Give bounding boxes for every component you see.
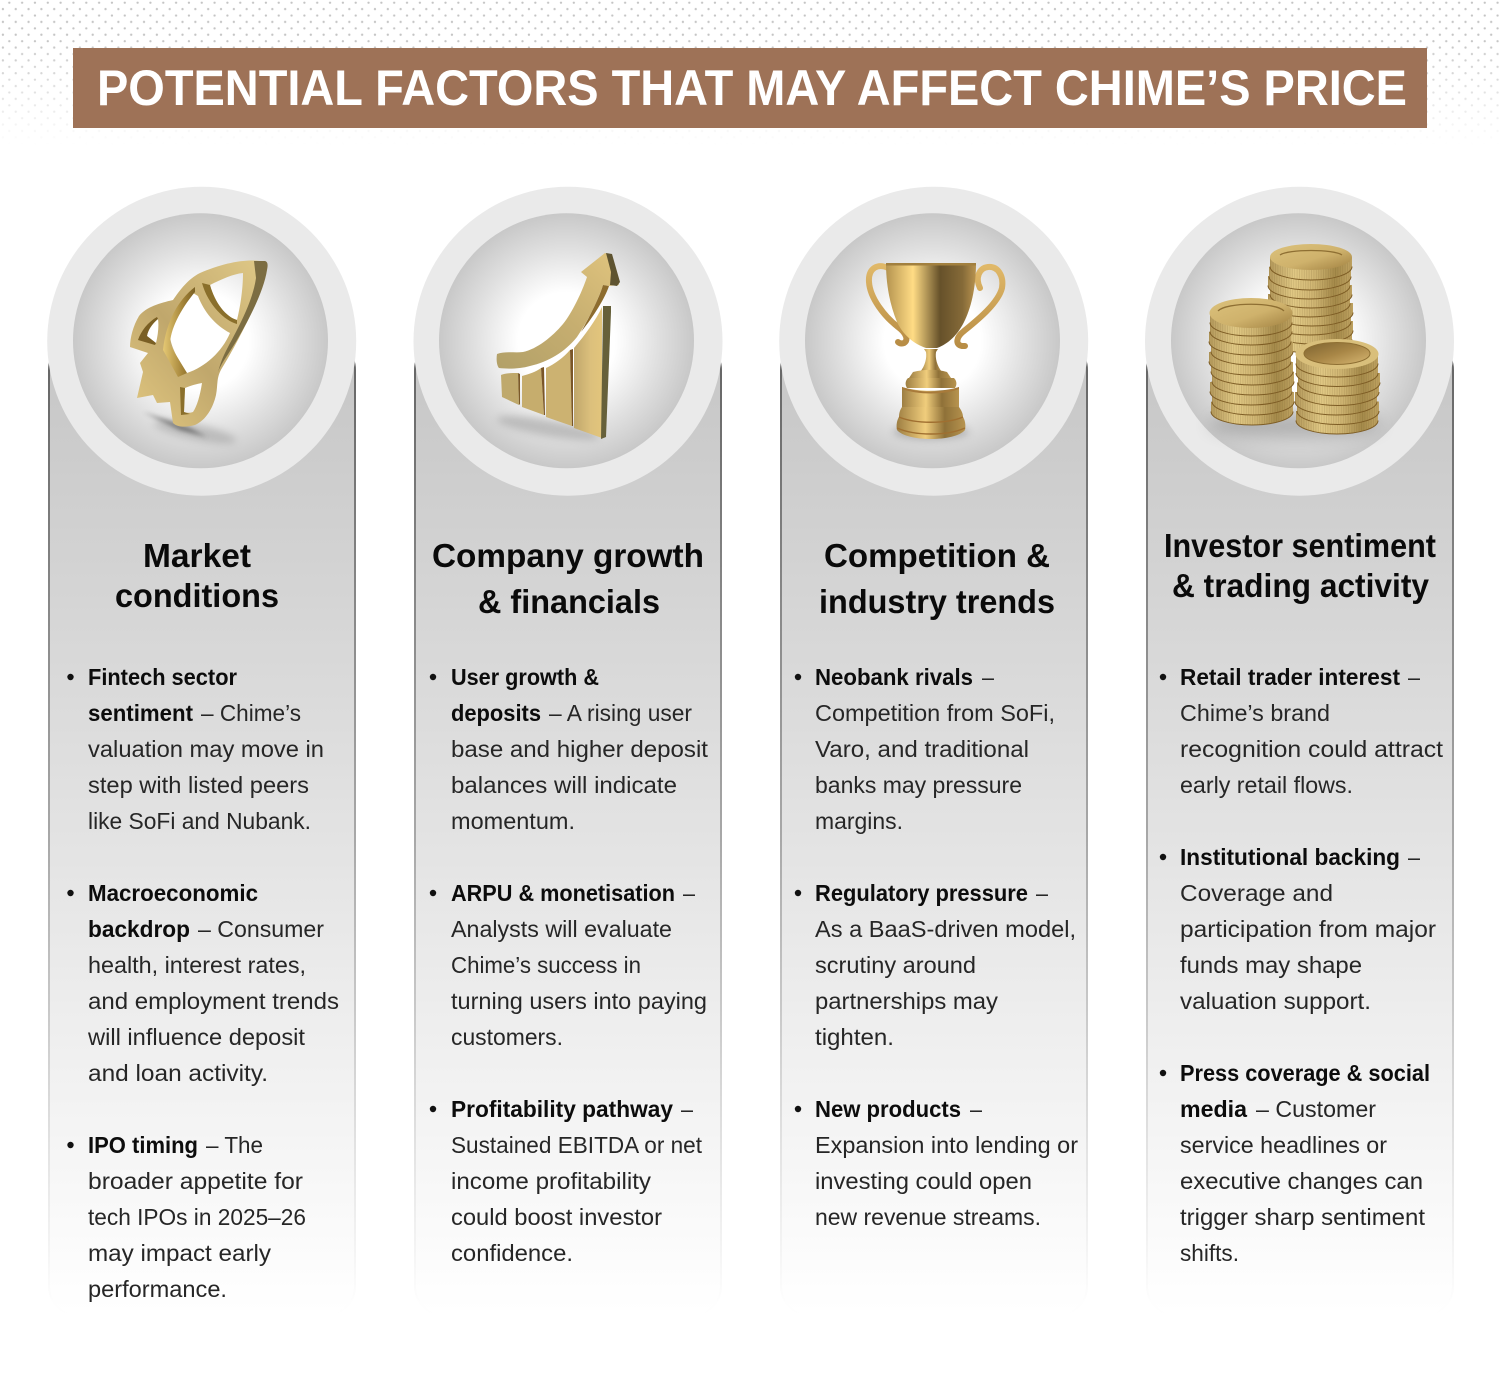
bullet: press coverage and social media: Press coverage & social <box>1180 1060 1430 1086</box>
bullet: regulatory pressure: As a BaaS-driven model, <box>815 916 1076 942</box>
bullet: fintech sector sentiment <box>67 664 324 834</box>
bullet: institutional backing: valuation support. <box>1180 988 1371 1014</box>
bullet: ARPU and monetisation: customers. <box>451 1024 563 1050</box>
bullet: IPO timing: may impact early <box>88 1240 272 1266</box>
bullet: fintech sector sentiment: – Chime’s <box>201 700 301 726</box>
bullet: regulatory pressure: partnerships may <box>815 988 999 1014</box>
bullet: user growth and deposits <box>430 664 709 834</box>
icon circle: coin stacks <box>1145 187 1454 496</box>
bullet: ARPU and monetisation <box>430 880 707 1050</box>
bullet: regulatory pressure: Regulatory pressure <box>815 880 1028 906</box>
bullet: macroeconomic backdrop: health, interest rates, <box>88 952 306 978</box>
bullet: profitability pathway <box>430 1096 703 1266</box>
bullet: user growth and deposits: – A rising user <box>549 700 692 726</box>
icon: gold rocket <box>130 260 268 449</box>
bullet: user growth and deposits: balances will indicate <box>451 772 677 798</box>
bullet: regulatory pressure: scrutiny around <box>815 952 976 978</box>
bullet: retail trader interest: – <box>1408 664 1420 690</box>
bullet: press coverage and social media <box>1160 1060 1430 1266</box>
bullet: profitability pathway: – <box>681 1096 693 1122</box>
bullet: new products: investing could open <box>815 1168 1032 1194</box>
title banner <box>73 48 1427 128</box>
heading: competition and industry trends: industry trends <box>819 583 1055 620</box>
bullet: new products: Expansion into lending or <box>815 1132 1078 1158</box>
bullet: ARPU and monetisation: – <box>683 880 695 906</box>
heading: investor sentiment and trading activity <box>1164 527 1436 604</box>
bullet: retail trader interest: recognition could attract <box>1180 736 1444 762</box>
bullet: press coverage and social media: – Customer <box>1256 1096 1376 1122</box>
dotted background pattern <box>2 2 1499 131</box>
bullet: user growth and deposits: User growth & <box>451 664 599 690</box>
bullet: new products <box>795 1096 1078 1230</box>
title: POTENTIAL FACTORS THAT MAY AFFECT CHIME’S PRICE <box>97 60 1407 116</box>
bullet: IPO timing: tech IPOs in 2025–26 <box>88 1204 306 1230</box>
bullet: neobank rivals: margins. <box>815 808 903 834</box>
bullet: neobank rivals: banks may pressure <box>815 772 1022 798</box>
bullet: macroeconomic backdrop <box>67 880 339 1086</box>
panel: company growth and financials <box>414 187 722 1316</box>
bullet: profitability pathway: could boost investor <box>451 1204 662 1230</box>
bullet: profitability pathway: Profitability pathway <box>451 1096 673 1122</box>
heading: competition and industry trends <box>819 537 1055 620</box>
icon: gold bar chart with arrow <box>495 253 620 445</box>
bullet: fintech sector sentiment: valuation may move in <box>88 736 324 762</box>
bullet: new products: – <box>970 1096 982 1122</box>
bullet: fintech sector sentiment: Fintech sector <box>88 664 237 690</box>
bullet: fintech sector sentiment: like SoFi and Nubank. <box>88 808 311 834</box>
bullet: new products: new revenue streams. <box>815 1204 1041 1230</box>
bullet: institutional backing: – <box>1408 844 1420 870</box>
bullet: ARPU and monetisation: ARPU & monetisation <box>451 880 675 906</box>
bullet: neobank rivals: Varo, and traditional <box>815 736 1029 762</box>
bullet: neobank rivals: Neobank rivals <box>815 664 973 690</box>
bullet: user growth and deposits: deposits <box>451 700 541 726</box>
bullet: macroeconomic backdrop: Macroeconomic <box>88 880 258 906</box>
bullet: institutional backing <box>1160 844 1436 1014</box>
icon circle: growth chart <box>414 187 722 496</box>
heading: market conditions: Market <box>143 537 251 574</box>
rocket window bevels <box>138 283 237 415</box>
panel: investor sentiment and trading activity <box>1145 187 1454 1316</box>
bullet: IPO timing: IPO timing <box>88 1132 198 1158</box>
bullet: retail trader interest: early retail flows. <box>1180 772 1353 798</box>
bullet: macroeconomic backdrop: and employment trends <box>88 988 339 1014</box>
bullet: regulatory pressure <box>795 880 1076 1050</box>
bullet: press coverage and social media: trigger sharp sentiment <box>1180 1204 1426 1230</box>
bullet: press coverage and social media: shifts. <box>1180 1240 1239 1266</box>
bullet: macroeconomic backdrop: backdrop <box>88 916 190 942</box>
bullet: profitability pathway: income profitability <box>451 1168 652 1194</box>
bullet: press coverage and social media: service headlines or <box>1180 1132 1387 1158</box>
bullet: IPO timing <box>67 1132 306 1302</box>
bullet: IPO timing: broader appetite for <box>88 1168 303 1194</box>
bullet: press coverage and social media: executive changes can <box>1180 1168 1423 1194</box>
bullet: neobank rivals <box>795 664 1055 834</box>
bullet: macroeconomic backdrop: will influence deposit <box>87 1024 306 1050</box>
icon: gold coin stacks <box>1209 244 1381 438</box>
heading: market conditions <box>115 537 279 614</box>
icon circle: rocket <box>47 187 356 496</box>
bullet: macroeconomic backdrop: – Consumer <box>198 916 324 942</box>
panel: competition and industry trends <box>779 187 1088 1316</box>
icon circle: trophy <box>779 187 1088 496</box>
bullet: neobank rivals: – <box>982 664 994 690</box>
bullet: ARPU and monetisation: Chime’s success in <box>451 952 641 978</box>
bullet: retail trader interest: Retail trader interest <box>1180 664 1400 690</box>
heading: company growth and financials: Company growth <box>432 537 704 574</box>
heading: market conditions: conditions <box>115 577 279 614</box>
bullet: profitability pathway: confidence. <box>451 1240 573 1266</box>
bullet: institutional backing: Coverage and <box>1180 880 1333 906</box>
bullet: fintech sector sentiment: sentiment <box>88 700 193 726</box>
bullet: new products: New products <box>815 1096 961 1122</box>
bullet: user growth and deposits: base and higher deposit <box>451 736 709 762</box>
bullet: institutional backing: Institutional backing <box>1180 844 1400 870</box>
bullet: ARPU and monetisation: turning users into paying <box>451 988 707 1014</box>
heading: investor sentiment and trading activity: & trading activity <box>1172 567 1430 604</box>
bullet: profitability pathway: Sustained EBITDA or net <box>451 1132 703 1158</box>
icon: gold trophy <box>869 263 1002 440</box>
bullet: neobank rivals: Competition from SoFi, <box>815 700 1055 726</box>
heading: company growth and financials: & financials <box>478 583 660 620</box>
bullet: regulatory pressure: tighten. <box>815 1024 894 1050</box>
bullet: retail trader interest: Chime’s brand <box>1180 700 1330 726</box>
bullet: ARPU and monetisation: Analysts will evaluate <box>451 916 672 942</box>
bullet: press coverage and social media: media <box>1180 1096 1247 1122</box>
bullet: IPO timing: – The <box>206 1132 263 1158</box>
bullet: institutional backing: participation from major <box>1180 916 1436 942</box>
bullet: fintech sector sentiment: step with listed peers <box>88 772 309 798</box>
heading: investor sentiment and trading activity: Investor sentiment <box>1164 527 1436 564</box>
bullet: user growth and deposits: momentum. <box>451 808 575 834</box>
heading: company growth and financials <box>432 537 704 620</box>
bullet: IPO timing: performance. <box>88 1276 227 1302</box>
bullet: macroeconomic backdrop: and loan activity. <box>88 1060 268 1086</box>
bullet: retail trader interest <box>1160 664 1444 798</box>
bullet: institutional backing: funds may shape <box>1180 952 1362 978</box>
panel: market conditions <box>47 187 356 1316</box>
heading: competition and industry trends: Competition & <box>824 537 1050 574</box>
bullet: regulatory pressure: – <box>1036 880 1048 906</box>
